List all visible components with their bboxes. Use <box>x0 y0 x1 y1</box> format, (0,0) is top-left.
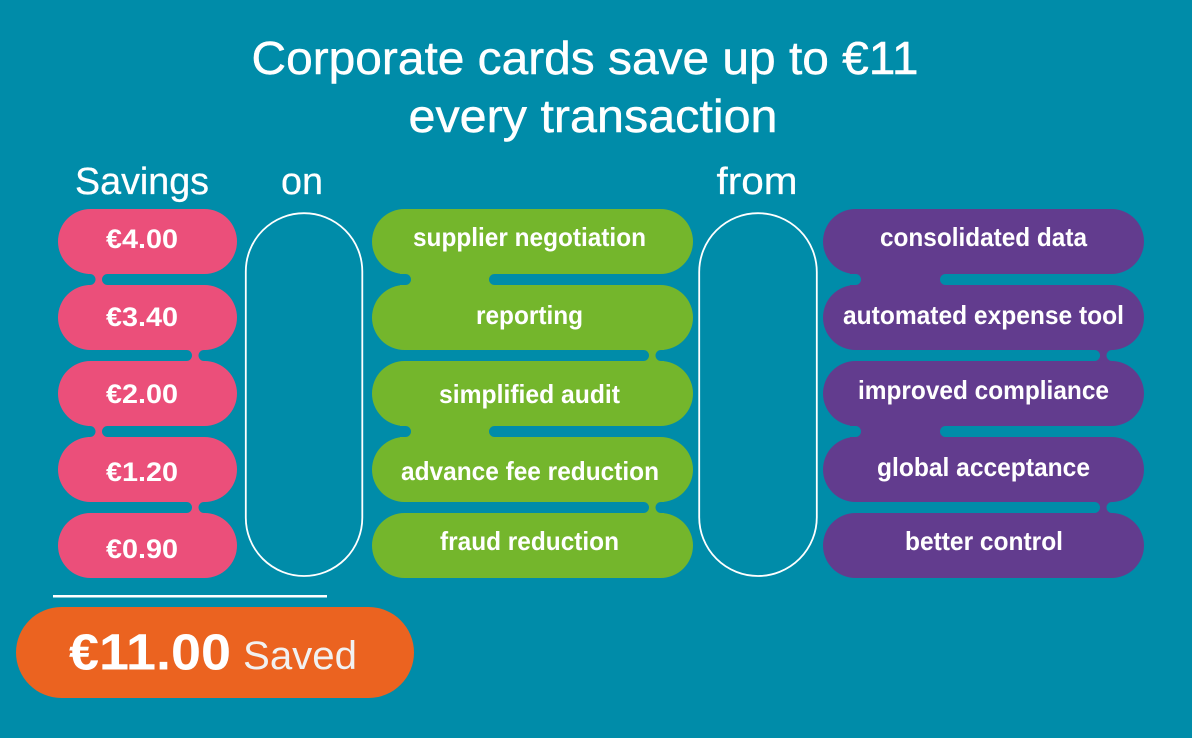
amount: 4.00: €4.00 <box>106 224 178 254</box>
label: improved compliance: improved compliance <box>858 375 1109 405</box>
amount: 3.40: €3.40 <box>106 302 178 332</box>
outline pill: on <box>246 213 362 576</box>
label: reporting: reporting <box>476 300 583 330</box>
label: better control: better control <box>905 526 1063 556</box>
total pill <box>16 607 414 698</box>
amount: 0.90: €0.90 <box>106 534 178 564</box>
amount: 2.00: €2.00 <box>106 379 178 409</box>
total label: Saved <box>243 634 357 678</box>
total amount: €11.00 <box>69 624 231 680</box>
panel: saving sources <box>823 209 1144 578</box>
sum line <box>53 595 327 598</box>
label: global acceptance: global acceptance <box>877 452 1090 482</box>
heading: on: on <box>281 161 323 203</box>
label: supplier negotiation: supplier negotiation <box>413 222 646 252</box>
heading: Savings: Savings <box>75 161 209 203</box>
label: automated expense tool: automated expense tool <box>843 300 1124 330</box>
title: every transaction <box>408 90 778 142</box>
outline pill: from <box>699 213 817 576</box>
label: consolidated data: consolidated data <box>880 222 1087 252</box>
amount: 1.20: €1.20 <box>106 457 178 487</box>
panel: saving areas <box>372 209 693 578</box>
panel: savings amounts <box>58 209 237 578</box>
label: fraud reduction: fraud reduction <box>440 526 619 556</box>
label: simplified audit: simplified audit <box>439 379 620 409</box>
label: advance fee reduction: advance fee reduction <box>401 456 659 486</box>
heading: from: from <box>716 161 798 203</box>
title <box>252 32 918 142</box>
title: Corporate cards save up to €11 <box>252 32 918 84</box>
